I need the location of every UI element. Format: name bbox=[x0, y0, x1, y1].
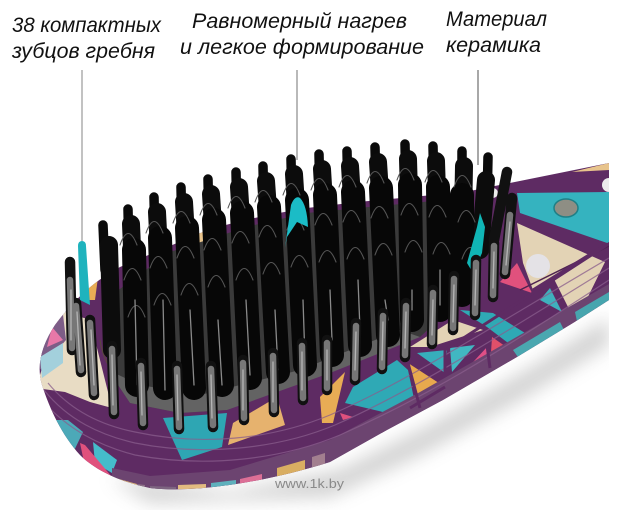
pattern: handle patches bbox=[36, 163, 610, 492]
heading: material: Материал bbox=[446, 8, 547, 31]
heading: even heating: Равномерный нагрев bbox=[192, 10, 407, 33]
front lip bbox=[112, 284, 609, 489]
heading: easy styling: и легкое формирование bbox=[180, 36, 424, 59]
bristle pad bbox=[105, 198, 465, 413]
bottom colour strip bbox=[112, 292, 609, 492]
bristle highlights bbox=[135, 270, 440, 390]
heading: comb teeth second line: зубцов гребня bbox=[11, 40, 155, 63]
heading: ceramic: керамика bbox=[446, 34, 541, 57]
bristle tip arcs bbox=[120, 168, 471, 245]
drop shadow under brush bbox=[110, 318, 609, 503]
teal bristles bbox=[78, 197, 485, 305]
bristles: back columns bbox=[103, 144, 488, 390]
heading: 38 compact teeth: 38 компактных bbox=[12, 14, 162, 37]
buttons bbox=[488, 178, 609, 278]
bristles: front pins bbox=[70, 172, 512, 429]
watermark: www.1k.by bbox=[274, 477, 345, 491]
brush body bbox=[30, 150, 620, 500]
callout lines bbox=[82, 70, 478, 242]
ribs bbox=[42, 258, 609, 461]
